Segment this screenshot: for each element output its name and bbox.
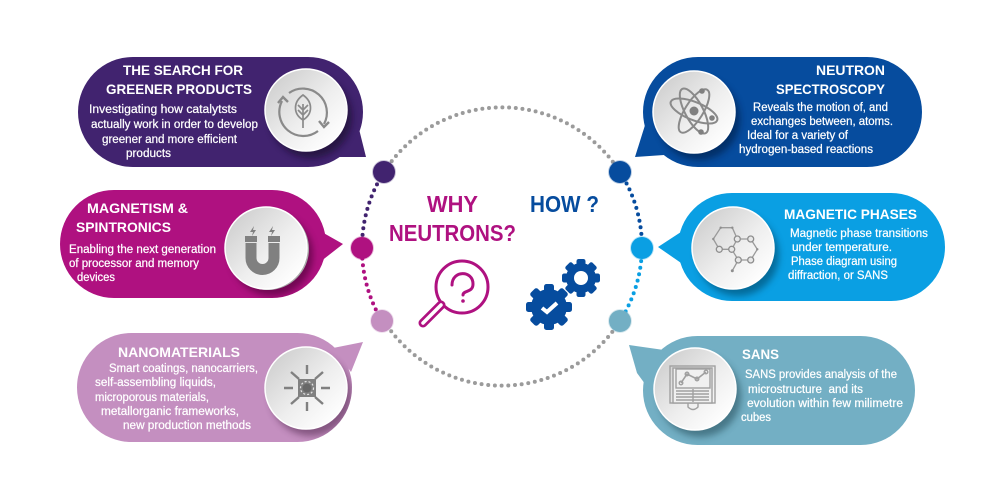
disc bbox=[653, 71, 740, 160]
body text: diffraction, or SANS bbox=[788, 270, 888, 282]
heading: why neutrons: WHY bbox=[427, 191, 478, 217]
bubble shape bbox=[658, 193, 945, 301]
body text bbox=[741, 369, 903, 424]
panel: the search for greener products bbox=[78, 57, 366, 167]
body text: new production methods bbox=[123, 420, 251, 432]
body text: of processor and memory bbox=[69, 258, 199, 270]
heading: SPINTRONICS bbox=[76, 219, 171, 235]
body text: self-assembling liquids, bbox=[95, 377, 216, 389]
body text: cubes bbox=[741, 412, 771, 424]
body text: evolution within few milimetre bbox=[747, 398, 903, 410]
bubble shape bbox=[629, 336, 915, 445]
body text bbox=[95, 363, 258, 432]
icon: nanoparticle bbox=[284, 365, 330, 411]
icon: leaf in cycle bbox=[278, 89, 329, 136]
heading: GREENER PRODUCTS bbox=[106, 81, 252, 97]
heading bbox=[106, 62, 252, 97]
heading: MAGNETISM & bbox=[87, 200, 188, 216]
panel: magnetism and spintronics bbox=[60, 190, 343, 298]
panel: SANS bbox=[629, 336, 915, 445]
body text: products bbox=[126, 148, 171, 160]
body text: microstructure and its bbox=[748, 384, 863, 396]
body text: Magnetic phase transitions bbox=[790, 228, 928, 240]
heading: SPECTROSCOPY bbox=[776, 81, 886, 97]
body text: under temperature. bbox=[792, 242, 892, 254]
body text: microporous materials, bbox=[95, 392, 209, 404]
heading: NEUTRON bbox=[816, 62, 885, 78]
heading: THE SEARCH FOR bbox=[123, 62, 243, 78]
icon: report with chart bbox=[670, 366, 715, 410]
disc bbox=[692, 207, 779, 296]
body text: greener and more efficient bbox=[102, 134, 238, 146]
dotted ring bbox=[362, 107, 642, 386]
body text: Investigating how catalytsts bbox=[89, 104, 237, 116]
body text bbox=[89, 104, 258, 160]
body text: SANS provides analysis of the bbox=[745, 369, 897, 381]
body text: Reveals the motion of, and bbox=[753, 102, 888, 114]
body text bbox=[788, 228, 928, 282]
body text: exchanges between, atoms. bbox=[751, 116, 893, 128]
icon: magnet bbox=[245, 226, 280, 270]
body text: actually work in order to develop bbox=[91, 119, 258, 131]
heading: SANS bbox=[742, 346, 779, 362]
body text: Phase diagram using bbox=[791, 256, 897, 268]
panel: neutron spectroscopy bbox=[635, 57, 922, 167]
heading: MAGNETIC PHASES bbox=[784, 206, 917, 222]
heading bbox=[776, 62, 886, 97]
icon: hexagon molecule bbox=[712, 226, 758, 272]
disc bbox=[265, 347, 352, 436]
body text: metallorganic frameworks, bbox=[101, 406, 239, 418]
heading: how: HOW ? bbox=[530, 191, 599, 217]
body text: hydrogen-based reactions bbox=[739, 144, 873, 156]
disc bbox=[654, 348, 741, 437]
icon: magnifier with question mark bbox=[423, 261, 488, 323]
body text: Smart coatings, nanocarriers, bbox=[109, 363, 258, 375]
body text: devices bbox=[77, 272, 115, 284]
ring nodes bbox=[351, 161, 653, 332]
panel: nanomaterials bbox=[77, 333, 363, 442]
icon: gears with check mark bbox=[526, 259, 600, 330]
disc bbox=[225, 207, 313, 296]
bubble shape bbox=[77, 333, 363, 442]
body text: Ideal for a variety of bbox=[747, 130, 849, 142]
heading: why neutrons bbox=[389, 191, 516, 246]
heading: why neutrons: NEUTRONS? bbox=[389, 220, 516, 246]
body text: Enabling the next generation bbox=[69, 244, 216, 256]
disc bbox=[265, 69, 352, 158]
body text bbox=[739, 102, 893, 156]
bubble shape bbox=[78, 57, 366, 167]
body text bbox=[69, 244, 216, 284]
heading bbox=[76, 200, 188, 235]
icon: atom bbox=[667, 85, 721, 137]
heading: NANOMATERIALS bbox=[118, 344, 240, 360]
bubble shape bbox=[60, 190, 343, 298]
panel: magnetic phases bbox=[658, 193, 945, 301]
bubble shape bbox=[635, 57, 922, 167]
